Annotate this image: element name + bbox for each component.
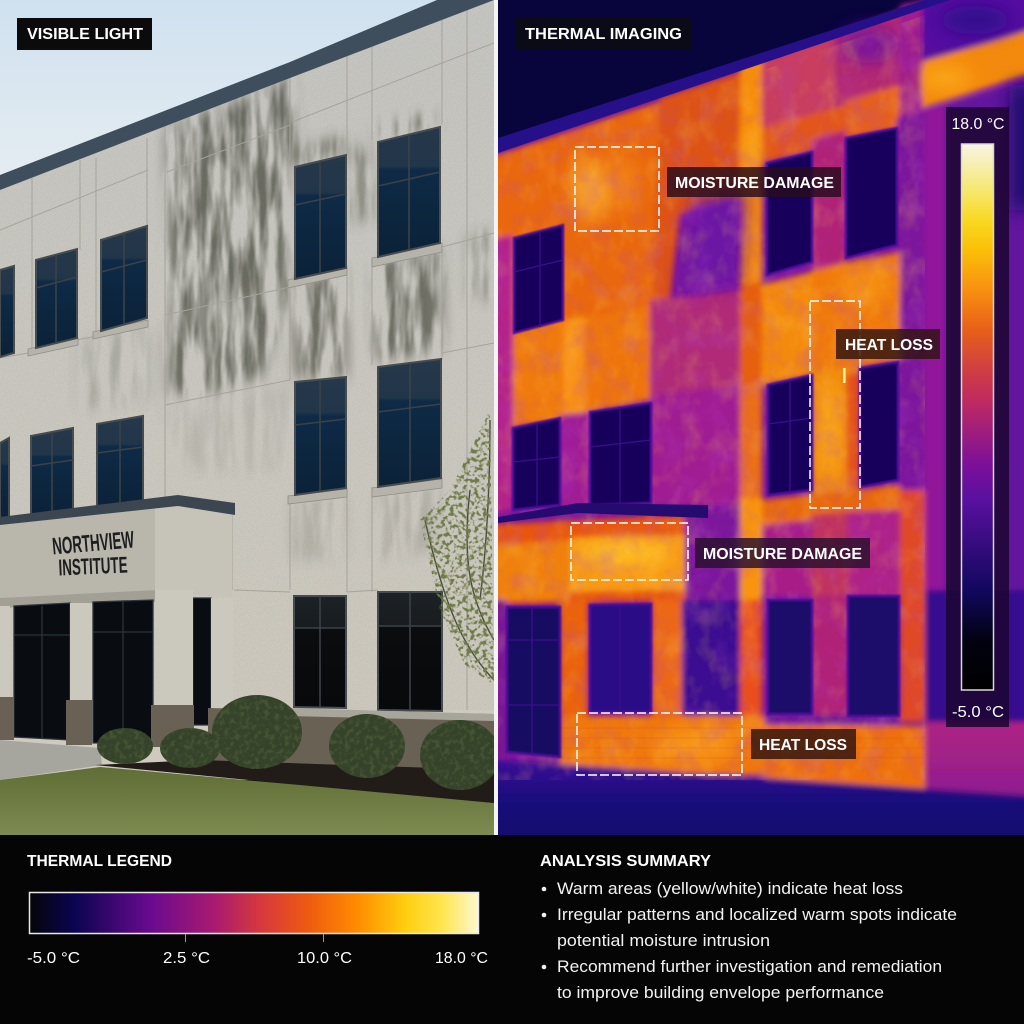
summary bullets: Irregular patterns and localized warm spots indicate xyxy=(557,905,957,924)
tag: thermal imaging heading: THERMAL IMAGING xyxy=(525,26,682,43)
legend heading: THERMAL LEGEND xyxy=(27,853,172,870)
walkway xyxy=(0,740,102,780)
thermal background xyxy=(498,38,1024,782)
callout: heat loss upper: HEAT LOSS xyxy=(845,337,933,354)
roof edge xyxy=(0,0,494,190)
wall grain xyxy=(0,0,494,720)
callout: heat loss upper xyxy=(810,301,940,508)
summary bullets xyxy=(542,879,957,1002)
sign: Northview Institute: INSTITUTE xyxy=(58,552,128,580)
legend ticks and values: -5.0 °C xyxy=(27,950,80,967)
callout: heat loss lower: HEAT LOSS xyxy=(759,737,847,754)
tag: visible light heading: VISIBLE LIGHT xyxy=(27,26,143,43)
tag: visible light heading xyxy=(17,18,152,50)
thermal wall blocks xyxy=(480,0,1024,860)
legend ticks and values: 10.0 °C xyxy=(297,950,352,967)
legend colour bar xyxy=(30,892,478,934)
shrubs xyxy=(97,695,500,790)
cool patches xyxy=(680,6,1024,292)
callout: moisture damage lower xyxy=(571,523,870,580)
stain patches on facade xyxy=(80,78,494,560)
legend ticks and values xyxy=(27,934,488,967)
panel: thermal image xyxy=(480,0,1024,860)
window sills xyxy=(28,243,442,504)
entrance canopy xyxy=(0,495,235,525)
thermal roof edge xyxy=(498,0,950,153)
thermal mullions xyxy=(507,232,812,755)
sign: Northview Institute: NORTHVIEW xyxy=(51,526,135,561)
limestone ledge xyxy=(288,708,494,721)
entrance fascia xyxy=(0,507,155,598)
sky xyxy=(0,0,437,175)
windows xyxy=(0,127,442,711)
callout: moisture damage upper: MOISTURE DAMAGE xyxy=(675,175,834,192)
callout: heat loss lower xyxy=(577,713,856,775)
building wall xyxy=(0,0,494,780)
divider xyxy=(494,0,498,835)
wall joints xyxy=(0,6,494,710)
panel: analysis summary xyxy=(540,853,957,1002)
tag: thermal imaging heading xyxy=(516,18,691,50)
vertical temperature scale: 18.0 °C xyxy=(952,116,1004,133)
brick base xyxy=(0,697,494,775)
entrance doors xyxy=(14,598,211,743)
entrance columns xyxy=(0,590,233,708)
entrance soffit xyxy=(0,590,155,608)
warm hotspots xyxy=(572,66,971,763)
panel: thermal legend xyxy=(27,853,488,967)
summary heading: ANALYSIS SUMMARY xyxy=(540,853,712,870)
summary bullets: Warm areas (yellow/white) indicate heat loss xyxy=(557,879,903,898)
thermal windows xyxy=(507,128,899,757)
panel: visible light photo xyxy=(0,0,500,835)
mulch bed xyxy=(95,760,494,803)
thermal mottling xyxy=(498,0,928,780)
heat leak streak xyxy=(843,368,846,383)
sign: Northview Institute xyxy=(52,531,134,576)
callout: moisture damage lower: MOISTURE DAMAGE xyxy=(703,546,862,563)
summary bullets: Recommend further investigation and remediation xyxy=(557,957,942,976)
brick courses xyxy=(560,728,1024,768)
summary bullets: to improve building envelope performance xyxy=(557,983,884,1002)
callout: moisture damage upper xyxy=(575,147,841,231)
thermal sky xyxy=(498,0,930,140)
window mullions xyxy=(31,135,442,711)
lawn xyxy=(0,767,494,835)
thermal canopy xyxy=(498,503,708,523)
tree xyxy=(420,410,494,685)
legend ticks and values: 2.5 °C xyxy=(163,950,210,967)
summary bullets: potential moisture intrusion xyxy=(557,931,770,950)
vertical temperature scale xyxy=(946,107,1009,727)
bottom panel background xyxy=(0,835,1024,1024)
vertical temperature scale: -5.0 °C xyxy=(952,704,1004,721)
legend ticks and values: 18.0 °C xyxy=(435,950,488,967)
